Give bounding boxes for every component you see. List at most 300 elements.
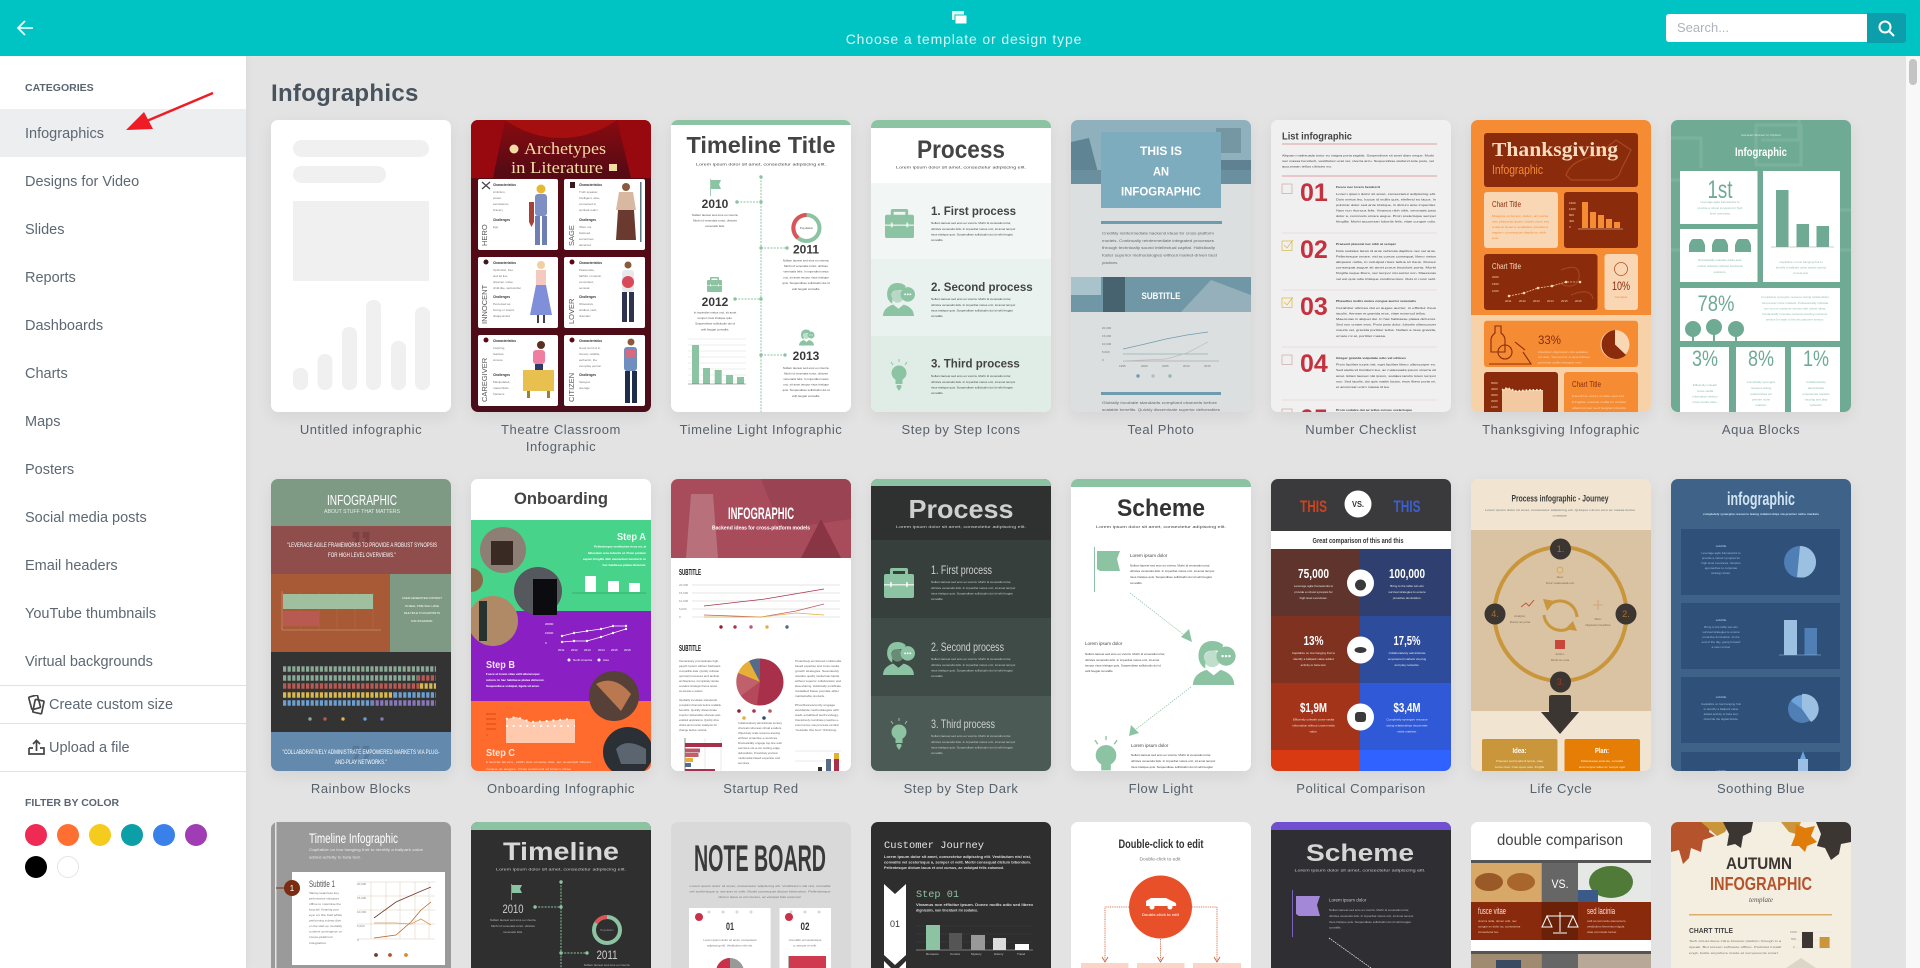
title block bbox=[1484, 133, 1638, 187]
template card: Political Comparison bbox=[1271, 479, 1451, 771]
create custom size button: Create custom size bbox=[49, 697, 173, 713]
template card: Timeline Light: Population bbox=[800, 226, 814, 230]
template card: Flow Light: Lorem ipsum dolor sit amet, consectetur adipiscing elit. bbox=[1096, 524, 1226, 529]
template card: Theatre Classroom: dramatic bbox=[579, 314, 591, 318]
template card: Thanksgiving: 2000 bbox=[1492, 275, 1499, 279]
step A: Step A bbox=[617, 532, 646, 543]
captions: Completely synergize resource taxing relationships bbox=[1761, 295, 1829, 299]
template card: Timeline Infographic: Subtitle 1 bbox=[309, 879, 335, 889]
line chart: 1995 bbox=[1119, 364, 1126, 368]
captions: one-to-one customer service with robust ideas. bbox=[1764, 306, 1826, 310]
column text: architectures. Completely iterate bbox=[679, 679, 719, 683]
pictogram rows bbox=[283, 669, 436, 703]
card label: Step by Step Dark bbox=[904, 781, 1018, 796]
title: Process infographic - Journey bbox=[1512, 494, 1608, 504]
card label bbox=[501, 422, 621, 454]
card label: Soothing Blue bbox=[1717, 781, 1805, 796]
template card: Double comparison: VS. bbox=[1552, 877, 1568, 891]
chevron step marker bbox=[884, 884, 906, 965]
template card: Note Board: 01 bbox=[726, 921, 734, 933]
item text: Sed eleifend tincidunt leo, ac malesuada ipsum viverra sit bbox=[1336, 368, 1436, 372]
template card: Customer Journey: Lorem ipsum dolor sit amet, consectetur adipiscing elit. Vestibulum nisl nisi, bbox=[884, 855, 1031, 859]
template card: Customer Journey bbox=[871, 822, 1051, 968]
template card: Thanksgiving: Faucibus turpis ornare sed est bbox=[1572, 394, 1624, 398]
template card: Theatre Classroom: fearless, bbox=[493, 352, 505, 356]
template card: Onboarding: 20000 bbox=[545, 622, 554, 626]
red comparison band bbox=[1471, 902, 1651, 940]
template card: Life Cycle: 2. bbox=[1622, 609, 1630, 619]
area chart bbox=[506, 717, 575, 743]
template card: Step by Step Icons: convallis. bbox=[931, 238, 944, 242]
template card: Double comparison: sed lacinia bbox=[1587, 906, 1615, 916]
title: Process bbox=[917, 136, 1005, 164]
create custom size button bbox=[28, 695, 173, 715]
template card: Onboarding: Suspendisse volutpat, ligula sit amet. bbox=[486, 684, 540, 688]
template card: Thanksgiving: 2015 bbox=[1561, 299, 1568, 303]
captions: Leverage agile frameworks to bbox=[1294, 584, 1334, 588]
template card: Thanksgiving: Interdum dignissim dui sodales bbox=[1538, 350, 1589, 354]
template card: Number Checklist: nec massa hendrerit, vestibulum erat vel, viverra arcu. Suspendisse eleifend ante justo, vel bbox=[1282, 159, 1434, 163]
step text: Nullam laoreet sed eros eu viverra. Morbi id venenatis tortor, bbox=[1131, 753, 1211, 757]
template card: Step by Step Icons bbox=[871, 120, 1051, 412]
category list: Social media posts bbox=[25, 510, 147, 526]
captions: Nullam laoreet sed eros eu viverra. bbox=[783, 366, 829, 370]
template card: Theatre Classroom: HERO bbox=[480, 224, 489, 246]
column text: maintainable products. bbox=[795, 694, 825, 698]
captions: Completely synergize bbox=[1747, 380, 1776, 384]
captions: Completely synergize resource bbox=[1386, 718, 1428, 722]
panel text: subtitle bbox=[1716, 544, 1727, 548]
intro text: through technically sound intellectual capital. Holistically bbox=[1102, 246, 1215, 250]
item text: Duis sodales lacus id ante vehicula dapibus nec vel ante. bbox=[1336, 249, 1436, 253]
template card: Theatre Classroom: average bbox=[579, 386, 590, 390]
captions: proactive domination. bbox=[1393, 596, 1421, 600]
text: Lorem ipsum dolor bbox=[1329, 898, 1367, 902]
step text: Nullam laoreet sed eros eu viverra. Morbi id venenatis tortor, bbox=[1085, 652, 1165, 656]
title: in Literature bbox=[511, 158, 603, 177]
line chart: 15,000 bbox=[357, 896, 367, 900]
captions: via plug and play bbox=[1805, 398, 1828, 402]
template card: Double comparison: vestibulum fermentum ligula bbox=[1587, 924, 1625, 928]
captions: orci, sit amet tempor risus tristique bbox=[783, 382, 829, 386]
step text: ultricies venenatis felis. In imperdiet metus orci, sit amet tempor bbox=[1131, 759, 1215, 763]
template card: Startup Red: 15,000 bbox=[679, 591, 689, 595]
cycle captions: Plan: bbox=[1595, 617, 1602, 621]
template card: Step by Step Dark: convallis. bbox=[931, 674, 944, 678]
template card: Autumn Infographic: speak. But screen software offline. Podcast install bbox=[1689, 945, 1781, 949]
cars bbox=[1689, 239, 1751, 252]
column text: Interactively procrastinate high- bbox=[679, 659, 719, 663]
flow arrows bbox=[1130, 593, 1191, 733]
template card: Teal Photo: SUBTITLE bbox=[1142, 291, 1180, 301]
template card: Thanksgiving: 10% bbox=[1612, 279, 1630, 293]
template card: Teal Photo: scalable benefits. Quickly disseminate superior deliverables bbox=[1102, 408, 1220, 412]
captions: venenatis felis. bbox=[705, 224, 725, 228]
template card: Customer Journey: dignissim, non tincidunt mi sodales. bbox=[916, 908, 978, 912]
template card: Rainbow Blocks: MULTIPLE TOUCHPOINTS bbox=[404, 611, 440, 615]
figures bbox=[1298, 567, 1425, 715]
panel text: Bring to the table win-win bbox=[1704, 625, 1738, 629]
template card: Step by Step Icons: Nullam laoreet sed eros eu viverra. Morbi id venenatis tortor, bbox=[931, 221, 1011, 225]
template card: Onboarding: rutrum. In hac habitasse platea dictumst. bbox=[486, 678, 545, 682]
captions: value. bbox=[1309, 730, 1318, 734]
template card: Startup Red: Backend ideas for cross-platform models bbox=[712, 526, 810, 532]
panel text: Override the digital divide. bbox=[1704, 717, 1739, 721]
template card: Onboarding: 2015 bbox=[611, 648, 618, 652]
template card: Step by Step Icons: Nullam laoreet sed eros eu viverra. Morbi id venenatis tortor, bbox=[931, 374, 1011, 378]
captions: Nullam laoreet sed eros eu viverra. bbox=[783, 258, 829, 262]
captions: venenatis felis. In imperdiet metus bbox=[783, 270, 829, 274]
template card: Onboarding: Interdu lorem, nibh dui ornare dui, ac suscipit libero bbox=[486, 760, 591, 764]
template card: Step by Step Icons: risus tristique quis. Suspendisse sollicitudin dui id velit feugiat bbox=[931, 232, 1013, 236]
line chart: 10,000 bbox=[1102, 342, 1112, 346]
item text: pulvinar dolor sed ante tristique, in dictum ante imperdiet. bbox=[1336, 203, 1436, 207]
column text: enabled applications. Quickly drive bbox=[679, 718, 719, 722]
center arrows bbox=[1544, 601, 1577, 630]
template card: Timeline Infographic: on the start-up mentality bbox=[309, 924, 343, 928]
figures: 13% bbox=[1304, 634, 1324, 648]
upload button: Upload a file bbox=[49, 740, 130, 756]
line chart: 10,000 bbox=[357, 910, 367, 914]
panel text: high level overviews. Iterative bbox=[1701, 561, 1741, 565]
column text: "outside the box" thinking. bbox=[795, 728, 837, 732]
captions: premier niche bbox=[1752, 398, 1770, 402]
template card: Startup Red: 10,000 bbox=[679, 599, 689, 603]
dotted connectors bbox=[1105, 907, 1217, 960]
card label: Theatre Classroom bbox=[501, 422, 621, 437]
cycle captions: Action: bbox=[1555, 652, 1565, 656]
column text: compliant channels before scalable bbox=[679, 703, 721, 707]
column text: via accurate e-markets. bbox=[679, 689, 703, 693]
item text: amet. Etiam laoreet nisi ipsum, sodales iaculis lorem tempor bbox=[1336, 374, 1436, 378]
template card: Timeline Infographic: Taking seamless key bbox=[309, 891, 340, 895]
template card: Theatre Classroom: Characteristics bbox=[579, 339, 602, 343]
template card: Theatre Classroom: Characteristics bbox=[579, 261, 602, 265]
template card: Thanksgiving: Infographic bbox=[1492, 162, 1543, 177]
item text: Proin facilisis turpis nisl, eget facilisis libero ullamcorper eu. bbox=[1336, 362, 1436, 366]
template card: Timeline Infographic: performing a deep dive bbox=[309, 918, 341, 922]
panel text: a new normal. bbox=[1712, 645, 1731, 649]
item text: Duis metus leo, luctus id mollis quis, eleifend eu lacus. In bbox=[1336, 198, 1436, 202]
captions: mortar solutions without functional bbox=[1697, 264, 1743, 268]
template card: Thanksgiving: 1000 bbox=[1491, 405, 1498, 409]
years: 2011 bbox=[793, 242, 819, 256]
template card: Theatre Classroom: fractions bbox=[493, 392, 505, 396]
quotes: ” bbox=[349, 523, 373, 576]
category list bbox=[25, 126, 156, 670]
category list: Infographics bbox=[25, 126, 104, 142]
captions: information without bbox=[1692, 394, 1718, 398]
template card: Aqua Blocks: Infographic bbox=[1735, 145, 1787, 159]
item text: fringilla. Morbi accumsan lobortis felis, vitae congue odio. bbox=[1336, 220, 1436, 224]
template card: Theatre Classroom: faithful, romantic, bbox=[579, 274, 602, 278]
template card: Theatre Classroom: authentic, the bbox=[579, 358, 597, 362]
template card: Theatre Classroom: Challenges bbox=[493, 373, 510, 377]
template card: Thanksgiving: justo. bbox=[1491, 236, 1499, 240]
years: 2010 bbox=[702, 197, 729, 211]
template card: Political Comparison: THIS bbox=[1394, 497, 1420, 516]
template card: Scheme dark: ultricies venenatis felis. In imperdiet metus orci, sit amet tempor bbox=[1329, 914, 1413, 918]
template card: Double comparison: viverra nulla, donec velit, nec bbox=[1478, 919, 1517, 923]
template card: Thanksgiving: fringilla massa nulla id mattis bbox=[1572, 400, 1627, 404]
item text: non. Sed iaculis, dui quis mattis luctus, risus libero porta mi, bbox=[1336, 380, 1436, 384]
template card: Life Cycle: Plan: bbox=[1595, 748, 1609, 755]
template card: Autumn Infographic: template bbox=[1749, 896, 1773, 904]
template card: Step by Step Dark: Nullam laoreet sed eros eu viverra. Morbi id venenatis tortor, bbox=[931, 657, 1011, 661]
captions: cross-media bbox=[1697, 389, 1713, 393]
search box bbox=[1666, 13, 1906, 43]
template card: Theatre Classroom: Obsessive, bbox=[579, 302, 594, 306]
captions: Capitalize on low hanging fruit to bbox=[1292, 651, 1336, 655]
template card: Onboarding: 0 bbox=[486, 733, 488, 737]
column text: channels whereas virtual e-tailers. bbox=[738, 726, 782, 730]
template card: Number Checklist bbox=[1271, 120, 1451, 412]
card label: Number Checklist bbox=[1305, 422, 1417, 437]
card label: Aqua Blocks bbox=[1722, 422, 1800, 437]
template card: Onboarding: North America bbox=[573, 658, 592, 662]
cycle captions: Dignissim faucibus bbox=[1585, 623, 1611, 627]
item text: ornare mi at, porttitor massa. bbox=[1336, 334, 1386, 338]
category list: YouTube thumbnails bbox=[25, 606, 156, 622]
line chart: 5,000 bbox=[357, 924, 365, 928]
line chart bbox=[357, 882, 435, 957]
category list: Designs for Video bbox=[25, 174, 139, 190]
line chart bbox=[562, 626, 626, 642]
template card: Step by Step Dark: risus tristique quis. Suspendisse sollicitudin dui id velit feugiat bbox=[931, 592, 1013, 596]
item text: iaculis. Aenean et gravida eros, vitae euismod tellus. bbox=[1336, 312, 1426, 316]
template card: Note Board: Lorem ipsum dolor sit amet, consectetur bbox=[703, 938, 757, 942]
template card: Rainbow Blocks: FOR HIGH LEVEL OVERVIEWS." bbox=[328, 552, 396, 559]
template card: Theatre Classroom: Perceived as bbox=[493, 302, 511, 306]
captions: Dynamically innovate resource-leveling customer bbox=[1762, 312, 1828, 316]
line chart: 20,000 bbox=[1102, 326, 1112, 330]
template card: Theatre Classroom: deceived bbox=[579, 243, 591, 247]
column text: Interactively coordinate proactive e- bbox=[795, 718, 839, 722]
template card: Aqua Blocks bbox=[1671, 120, 1851, 412]
template card: Timeline Light: Lorem ipsum dolor sit amet, consectetur adipiscing elit. bbox=[696, 162, 826, 166]
template card: Rainbow Blocks: IN REAL-TIME WILL HAVE bbox=[405, 604, 439, 608]
line chart: SUBTITLE bbox=[679, 568, 701, 577]
category list: Maps bbox=[25, 414, 60, 430]
template card: Theatre Classroom: Good word of in, bbox=[579, 346, 601, 350]
step heading: Step 01 bbox=[916, 890, 959, 901]
template card: Step by Step Icons: ultricies venenatis felis. In imperdiet metus orci, sit amet tempor bbox=[931, 303, 1015, 307]
template card: Timeline Infographic: long tail. Keeping your bbox=[309, 908, 339, 912]
column text: services vis-a-vis cutting-edge bbox=[738, 746, 780, 750]
template card: Timeline Infographic: added activity to beta test. bbox=[309, 856, 361, 860]
search box: Search... bbox=[1677, 20, 1729, 35]
template card: Onboarding: 200000 bbox=[486, 727, 496, 731]
captions: orci, sit amet tempor risus tristique bbox=[783, 276, 829, 280]
template card: Step by Step Icons: Nullam laoreet sed eros eu viverra. Morbi id venenatis tortor, bbox=[931, 297, 1011, 301]
cycle captions: Donec ac porta bbox=[1510, 620, 1530, 624]
step bands bbox=[871, 183, 1051, 259]
template card: Double-click to edit: Double-click to edit bbox=[1142, 912, 1180, 917]
item text: Phasellus mollis metus congue auctor venenatis bbox=[1336, 299, 1416, 303]
template card: Thanksgiving: 2011 bbox=[1505, 299, 1512, 303]
item text: et accumsan enim massa id leo. bbox=[1336, 385, 1390, 389]
captions bbox=[1692, 200, 1830, 407]
template card: Onboarding: 2014 bbox=[598, 648, 605, 652]
column text: covalent strategic theme areas bbox=[679, 684, 717, 688]
template card: Theatre Classroom: sensual bbox=[579, 286, 590, 290]
line chart: 15,000 bbox=[1102, 334, 1112, 338]
template card: Soothing Blue bbox=[1671, 479, 1851, 771]
template card: Theatre Classroom bbox=[471, 120, 651, 412]
captions: networks. bbox=[1810, 403, 1823, 407]
template card: Timeline Infographic: offline to maximise the bbox=[309, 902, 341, 906]
category list: Virtual backgrounds bbox=[25, 654, 153, 670]
icons bbox=[1347, 570, 1374, 730]
annotation arrow bbox=[126, 92, 214, 130]
captions: provide a robust synopsis for high bbox=[1698, 206, 1743, 210]
column text: Phosfluorescently engage bbox=[795, 703, 835, 707]
panel text: end of the day, going forward bbox=[1702, 640, 1741, 644]
template card: Onboarding: bibendum arcu lobortis ut. Proin pretium bbox=[588, 551, 646, 555]
template card: Rainbow Blocks: USER GENERATED CONTENT bbox=[402, 596, 442, 600]
template card: Step by Step Icons: ultricies venenatis felis. In imperdiet metus orci, sit amet tempor bbox=[931, 380, 1015, 384]
intro text: foster superior methodologies without market-driven best bbox=[1102, 254, 1218, 258]
template card: Teal Photo: INFOGRAPHIC bbox=[1121, 184, 1201, 198]
captions: via premier niche markets. Professionally cultivate bbox=[1762, 301, 1829, 305]
mini bars: 500 bbox=[1791, 937, 1796, 941]
bar chart bbox=[688, 339, 746, 384]
template card: Step by Step Dark: Nullam laoreet sed eros eu viverra. Morbi id venenatis tortor, bbox=[931, 580, 1011, 584]
template card: Thanksgiving: 2016 bbox=[1575, 299, 1582, 303]
template card: Theatre Classroom: everyday person bbox=[579, 364, 602, 368]
food photos bbox=[1471, 863, 1542, 902]
intro text: practices. bbox=[1102, 261, 1118, 265]
title bbox=[510, 139, 617, 177]
bars bbox=[1784, 620, 1797, 655]
template card: Scheme dark bbox=[1271, 822, 1451, 968]
panel text: to identify a ballpark value bbox=[1704, 707, 1739, 711]
template card: Thanksgiving: 2012 bbox=[1519, 299, 1526, 303]
template card: Scheme dark: risus tristique quis. Suspendisse sollicitudin dui id velit feugiat bbox=[1329, 920, 1411, 924]
step text: 3. Third process bbox=[931, 358, 1020, 370]
template card: Timeline dark: Nullam laoreet sed eros eu viverra. bbox=[490, 918, 536, 922]
sidebar bbox=[0, 56, 246, 968]
captions: velit feugiat convallis. bbox=[792, 287, 820, 291]
column text: superior deliverables whereas web- bbox=[679, 713, 721, 717]
template card: Timeline dark: Lorem ipsum dolor sit amet, consectetur adipiscing elit. bbox=[496, 866, 626, 872]
dashed arrow bbox=[1329, 938, 1371, 968]
template card: Step by Step Dark: ultricies venenatis felis. In imperdiet metus orci, sit amet tempor bbox=[931, 663, 1015, 667]
years: 2013 bbox=[793, 349, 820, 363]
captions: identify a ballpark value added bbox=[1293, 657, 1334, 661]
white content box bbox=[292, 872, 445, 965]
template card: Teal Photo: THIS IS bbox=[1140, 144, 1182, 158]
template card: Theatre Classroom: intelligent, wise, bbox=[579, 196, 600, 200]
title: Onboarding bbox=[514, 489, 608, 508]
card label: Flow Light bbox=[1129, 781, 1193, 796]
numbers: 1% bbox=[1803, 346, 1829, 371]
template card: Startup Red: INFOGRAPHIC bbox=[728, 504, 794, 523]
item text: Curabitur ultrices dui et augue auctor, in efficitur risus bbox=[1336, 306, 1437, 310]
template card: Timeline Light bbox=[671, 120, 851, 412]
autumn leaves bbox=[1671, 822, 1851, 864]
panel text: Capitalize on low hanging fruit bbox=[1701, 702, 1741, 706]
food illustration bbox=[1489, 326, 1531, 364]
title: AUTUMN bbox=[1726, 854, 1792, 873]
template card: Rainbow Blocks bbox=[271, 479, 451, 771]
captions: activity to beta test. bbox=[1301, 663, 1327, 667]
template card: Onboarding: 0 bbox=[545, 641, 547, 645]
template card: Onboarding: sapien fringilla nibh elementum hendrerit. In bbox=[583, 557, 646, 561]
title: double comparison bbox=[1497, 832, 1623, 849]
pie chart: SUBTITLE bbox=[679, 644, 701, 653]
template card: Theatre Classroom: sincere bbox=[493, 358, 503, 362]
captions: cross-media value. bbox=[1692, 400, 1718, 404]
numbers: 8% bbox=[1748, 346, 1774, 371]
card label: Life Cycle bbox=[1530, 781, 1592, 796]
template card: Onboarding: Asia bbox=[603, 658, 609, 662]
column text: clicks-and-mortar catalysts for bbox=[679, 723, 717, 727]
template card: Flow Light bbox=[1071, 479, 1251, 771]
captions: Nullam laoreet sed eros eu viverra. bbox=[692, 213, 738, 217]
color swatches bbox=[25, 824, 207, 878]
header photo bbox=[671, 479, 851, 558]
template card: Step by Step Dark: risus tristique quis. Suspendisse sollicitudin dui id velit feugiat bbox=[931, 668, 1013, 672]
captions: Efficiently unleash bbox=[1693, 383, 1717, 387]
template card: Note Board: Lorem ipsum dolor sit amet, consectetur adipiscing elit. Vestibulum nisl nisi, convallis bbox=[690, 884, 831, 888]
archetype panels bbox=[478, 179, 645, 406]
line chart: 0 bbox=[1102, 358, 1104, 362]
template card: Customer Journey: Vivamus non efficitur ipsum. Donec mollis odio sed libero bbox=[916, 903, 1033, 907]
template card: Theatre Classroom: Ambition, bbox=[493, 190, 506, 194]
template card: Timeline dark: Nullam laoreet sed eros eu viverra. bbox=[584, 963, 630, 967]
column text: commerce via process-centric bbox=[795, 723, 840, 727]
captions: In imperdiet metus orci, sit amet bbox=[694, 310, 736, 314]
title: List infographic bbox=[1282, 132, 1352, 142]
title row: THIS bbox=[1300, 497, 1327, 516]
template card: Note Board: vel scelerisque a, semper et velit. Morbi consequat dictum bibendum. Pellentesque bbox=[690, 890, 831, 894]
step text: ultricies venenatis felis. In imperdiet metus orci, sit amet tempor bbox=[1130, 569, 1214, 573]
step text: velit feugiat convallis. bbox=[1085, 669, 1114, 673]
template card: Note Board: dictum lacus et orci cursus, ac volutpat felis euismod. bbox=[718, 895, 802, 899]
template card: Theatre Classroom: LOVER bbox=[567, 298, 576, 324]
years: 2010 bbox=[502, 902, 524, 916]
item text: Sed non ornare eros. Proin justo dolor, lobortis ullamcorper bbox=[1336, 322, 1436, 326]
template card: Thanksgiving: ornare. Senectus suspendisse bbox=[1538, 355, 1590, 359]
template card: Double comparison: fusce vitae bbox=[1478, 906, 1506, 916]
step text: convallis. bbox=[1130, 581, 1143, 585]
bar chart: Comics bbox=[950, 952, 961, 956]
flag icon bbox=[1094, 547, 1120, 592]
numbers: 3% bbox=[1692, 346, 1718, 371]
template card: Scheme dark: convallis. bbox=[1329, 926, 1342, 930]
column text: services. bbox=[738, 761, 750, 765]
template card: Thanksgiving: Chart Title bbox=[1492, 261, 1521, 271]
template card: Thanksgiving: pulvinar pellentesque nisl. bbox=[1538, 360, 1582, 364]
bar chart bbox=[1776, 190, 1829, 247]
column text: without superior collaboration and bbox=[795, 679, 841, 683]
template card: Theatre Classroom: bravery bbox=[493, 208, 504, 212]
color filter heading: FILTER BY COLOR bbox=[25, 797, 119, 809]
card label: Infographic bbox=[526, 439, 596, 454]
template card: Theatre Classroom: Swayed, bbox=[579, 380, 591, 384]
template card: Onboarding: 10000 bbox=[545, 631, 554, 635]
template card: Autumn Infographic: Tech virtual drone inline browser platform through in a bbox=[1689, 939, 1781, 943]
template card: Thanksgiving: Chart Title bbox=[1492, 199, 1521, 209]
column text: Globally incubate standards bbox=[679, 698, 718, 702]
template card: Timeline Infographic: 1 bbox=[290, 884, 295, 893]
template card: Life Cycle: Lorem ipsum dolor sit amet, consectetur adipiscing elit. Quisque rutrum arcu ac massa luctus bbox=[1485, 508, 1636, 512]
template card: Timeline Infographic: performance indicators bbox=[309, 896, 339, 900]
template card: Theatre Classroom: connected to bbox=[579, 202, 597, 206]
template card: Note Board: 02 bbox=[800, 921, 810, 933]
numbers: 04 bbox=[1300, 350, 1328, 378]
